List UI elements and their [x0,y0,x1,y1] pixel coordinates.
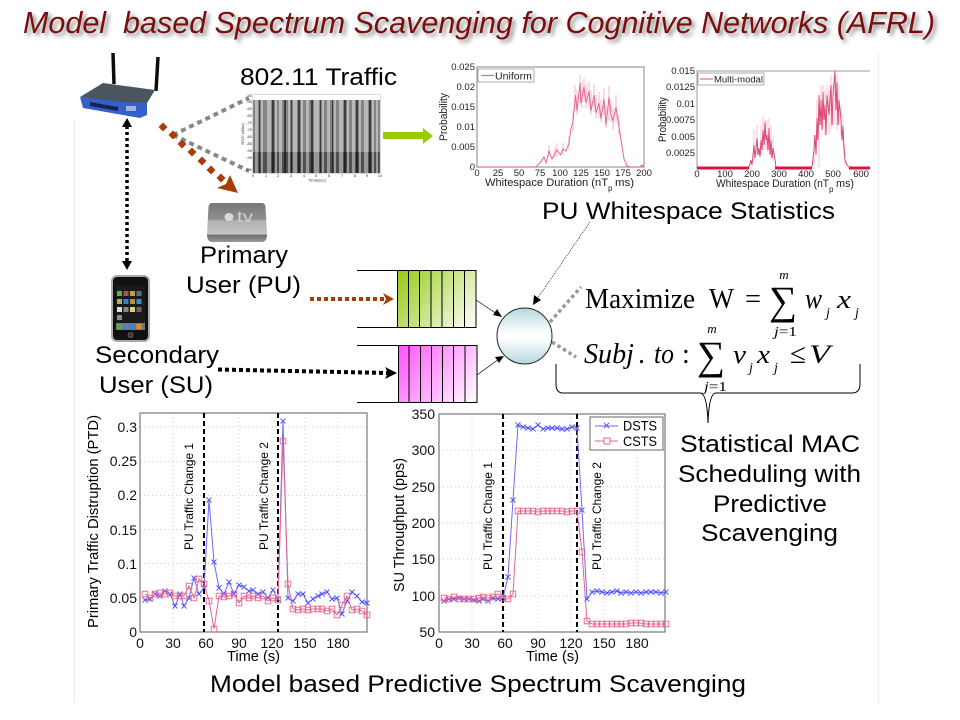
traffic plot tick labels: -75 [246,127,253,132]
throughput series: DSTS [444,425,666,601]
throughput dashed lines: PU traffic changes [503,414,577,632]
chart: multi-modal whitespace distribution [657,66,870,194]
multi-modal axis labels [657,97,854,194]
icon: Apple TV [207,203,267,242]
uniform tick labels [451,62,652,179]
caption: model based predictive spectrum scavenging: Model based Predictive Spectrum Scavenging [210,671,746,698]
PTD change labels: PU Traffic Change 1 [182,443,196,550]
formula: maximize: j=1 [772,325,797,340]
uniform tick labels: 100 [552,168,568,179]
traffic plot tick labels: -95 [246,155,253,160]
icon: wireless router [80,53,158,118]
throughput tick labels: 180 [625,635,649,651]
formula: subject to [584,321,834,395]
PTD tick labels: 60 [198,635,214,651]
formula: subject to: Subj [584,339,634,370]
formula: maximize [585,267,859,340]
throughput tick labels: 120 [559,635,583,651]
multi-modal tick labels: 200 [744,169,760,180]
traffic plot tick labels [240,93,383,182]
formula: maximize: m [779,267,789,282]
traffic plot tick labels: 1 [265,173,268,178]
formula: subject to: ≤ [790,339,806,370]
throughput change labels [481,462,604,570]
dotted projection lines to traffic plot [173,98,249,171]
PTD tick labels: 0.05 [110,590,137,606]
throughput change labels: PU Traffic Change 2 [590,462,604,570]
PTD axis labels: Time (s) [227,648,280,665]
PTD dashed lines: PU traffic changes [204,413,278,632]
text: statistical MAC scheduling: Predictive [713,491,827,518]
multi-modal axis labels: p [829,185,834,194]
traffic plot tick labels: RSSI (dBm) [240,123,245,145]
uniform axis labels: Whitespace Duration (nT [485,177,608,189]
PTD change labels [182,442,271,550]
multi-modal tick labels: 0.0125 [666,82,695,93]
traffic plot tick labels: 2 [277,173,280,178]
throughput tick labels: 30 [464,635,480,651]
queue: primary user [357,270,476,328]
traffic plot tick labels: 9 [366,173,369,178]
multi-modal tick labels: 100 [717,169,733,180]
text: statistical MAC scheduling: Scavenging [701,520,838,547]
traffic plot tick labels: -80 [246,134,253,139]
throughput axis labels: SU Throughput (pps) [391,458,408,592]
PTD axis labels [85,415,280,665]
heading: PU Whitespace Statistics: PU Whitespace Statistics [542,198,835,225]
multi-modal tick labels: 500 [825,169,841,180]
PTD tick labels: 90 [231,635,247,651]
formula: maximize: j [824,306,830,321]
uniform tick labels: 0.01 [456,122,475,133]
multi-modal tick labels: 0 [694,169,700,180]
formula: subject to: x [756,340,771,369]
traffic plot tick labels: -50 [246,93,253,98]
traffic plot tick labels: 5 [315,173,318,178]
traffic plot tick labels: Time(sec) [308,178,326,182]
traffic plot tick labels: 4 [303,173,306,178]
uniform axis labels: ms) [615,177,634,189]
uniform tick labels: 0.015 [451,102,475,113]
formula: subject to: ∑ [697,333,725,378]
PTD tick labels [110,419,350,651]
label: Primary User [186,242,301,299]
uniform tick labels: 150 [594,168,610,179]
throughput legend: CSTS [623,433,657,449]
throughput tick labels [412,406,649,651]
traffic plot tick labels: -100 [244,167,253,172]
label: Secondary User: User (SU) [99,372,213,399]
traffic plot tick labels: 6 [328,173,331,178]
uniform tick labels: 175 [615,168,631,179]
PTD tick labels: 150 [293,635,317,651]
uniform tick labels: 0 [474,168,480,179]
arrow: secondary user to queue (black) [218,367,397,379]
traffic plot tick labels: 10 [378,173,383,178]
uniform tick labels: 50 [514,168,524,179]
multi-modal axis labels: ms) [836,178,854,190]
arrow: router to primary user (brown) [158,122,238,193]
throughput tick labels: 150 [412,551,435,567]
throughput tick labels: 0 [435,635,443,651]
uniform tick labels: 0.005 [451,142,475,153]
PTD tick labels: 120 [260,635,284,651]
traffic plot tick labels: -55 [246,99,253,104]
title: Model based Spectrum Scavenging for Cognitive Networks (AFRL) [23,5,935,40]
traffic plot tick labels: -90 [246,148,253,153]
PTD tick labels: 0.25 [110,453,137,469]
multi-modal legend [698,73,764,85]
formula: maximize: = [745,284,761,315]
throughput tick labels: 350 [412,406,435,422]
formula: maximize: W [709,284,735,315]
formula: subject to: j [772,361,778,376]
formula: subject to: v [733,340,747,369]
throughput tick labels: 150 [592,635,616,651]
multi-modal tick labels: 300 [771,169,787,180]
throughput tick labels: 300 [412,442,435,458]
throughput change labels: PU Traffic Change 1 [481,462,495,570]
throughput tick labels: 250 [412,479,435,495]
multi-modal tick labels: 0.0025 [666,148,695,159]
text: statistical MAC scheduling: Statistical MAC [680,431,860,458]
formula: subject to: m [707,321,717,336]
uniform error bars [549,75,619,159]
multi-modal data lines [749,71,849,167]
traffic plot tick labels: 0 [252,173,255,178]
arrow: queue 2 to scheduler [477,356,504,375]
brace under formula [556,364,860,423]
uniform legend [478,69,534,82]
heading: 802.11 Traffic: 802.11 Traffic [240,64,397,91]
throughput legend [590,417,663,450]
uniform axis labels: p [608,184,613,193]
uniform tick labels: 125 [573,168,589,179]
formula: subject to: V [809,340,834,369]
formula: maximize: x [836,285,852,314]
throughput tick labels: 90 [530,635,546,651]
page frame lines [74,52,878,703]
uniform tick labels: 0 [470,162,475,173]
chart: primary traffic disruption [85,413,367,665]
multi-modal axis labels: Probability [657,97,669,142]
traffic plot tick labels: 3 [290,173,293,178]
PTD tick labels: 0 [129,624,137,640]
multi-modal tick labels [666,66,869,180]
throughput axis labels [391,458,579,665]
PTD tick labels: 0 [136,635,144,651]
multi-modal tick labels: 0.01 [676,99,695,110]
traffic plot tick labels: -85 [246,141,253,146]
formula: maximize: Maximize [585,284,695,315]
uniform axis labels [438,93,634,193]
throughput axis labels: Time (s) [526,648,579,665]
PTD tick labels: 0.2 [118,487,137,503]
traffic plot tick labels: 8 [354,173,357,178]
label: Primary User: Primary [200,242,288,269]
multi-modal tick labels: 0.0075 [666,115,695,126]
scheduler circle [497,308,552,364]
multi-modal tick labels: 600 [853,169,869,180]
arrow: router to secondary user (double-headed dotted) [122,118,132,270]
uniform tick labels: 25 [493,168,503,179]
uniform tick labels: 0.02 [456,82,475,93]
uniform legend: Uniform [495,72,532,82]
multi-modal tick labels: 400 [798,169,814,180]
uniform tick labels: 0.025 [451,62,475,73]
PTD change labels: PU Traffic Change 2 [257,442,271,550]
label: Secondary User [95,342,219,399]
multi-modal tick labels: 0.015 [671,66,695,77]
chart: SU throughput [391,406,666,665]
uniform axis labels: Probability [438,93,450,141]
formula: subject to: . [638,339,645,370]
uniform data line [477,83,644,167]
throughput tick labels: 50 [419,624,435,640]
queue: secondary user [357,346,477,402]
icon: iPhone [112,276,149,341]
multi-modal legend: Multi-modal [714,74,763,84]
arrow: traffic to statistics (green) [383,128,433,144]
formula: maximize: w [805,284,822,315]
PTD tick labels: 180 [326,635,350,651]
traffic plot tick labels: -60 [246,106,253,111]
uniform tick labels: 200 [636,168,652,179]
traffic plot tick labels: -65 [246,113,253,118]
formula: subject to: j=1 [702,380,727,395]
uniform tick labels: 75 [535,168,545,179]
throughput tick labels: 200 [412,515,435,531]
multi-modal error bars [754,71,845,167]
multi-modal tick labels: 0.005 [671,132,695,143]
arrow: queue 1 to scheduler [476,300,502,317]
formula: maximize: j [853,306,859,321]
label: Primary User: User (PU) [186,272,301,299]
formula: maximize: ∑ [769,278,797,323]
PTD tick labels: 30 [165,635,181,651]
PTD tick labels: 0.3 [118,419,137,435]
throughput tick labels: 60 [497,635,513,651]
traffic plot tick labels: -70 [246,120,253,125]
multi-modal axis labels: Whitespace Duration (nT [716,178,829,190]
throughput legend: DSTS [623,418,657,434]
formula: subject to: : [682,339,690,370]
text: statistical MAC scheduling: Scheduling with [678,461,861,488]
text: statistical MAC scheduling [678,431,861,547]
arrow: primary user to queue (brown) [310,293,394,305]
throughput series: CSTS [444,511,666,624]
chart: uniform whitespace distribution [438,62,652,193]
PTD axis labels: Primary Traffic Distruption (PTD) [85,415,102,628]
throughput tick labels: 100 [412,588,435,604]
dotted links from scheduler to optimization formula [550,287,581,357]
PTD series: DSTS [145,421,367,614]
formula: subject to: j [747,361,753,376]
arrow: whitespace statistics to scheduler [533,222,590,305]
chart: 802.11 traffic [240,93,383,182]
traffic plot tick labels: 7 [341,173,344,178]
formula: subject to: to [654,339,674,370]
icon: Apple TV: tv [237,209,253,226]
PTD tick labels: 0.1 [118,556,137,572]
label: Secondary User: Secondary [95,342,219,369]
PTD tick labels: 0.15 [110,522,137,538]
PTD series: CSTS [145,441,367,629]
